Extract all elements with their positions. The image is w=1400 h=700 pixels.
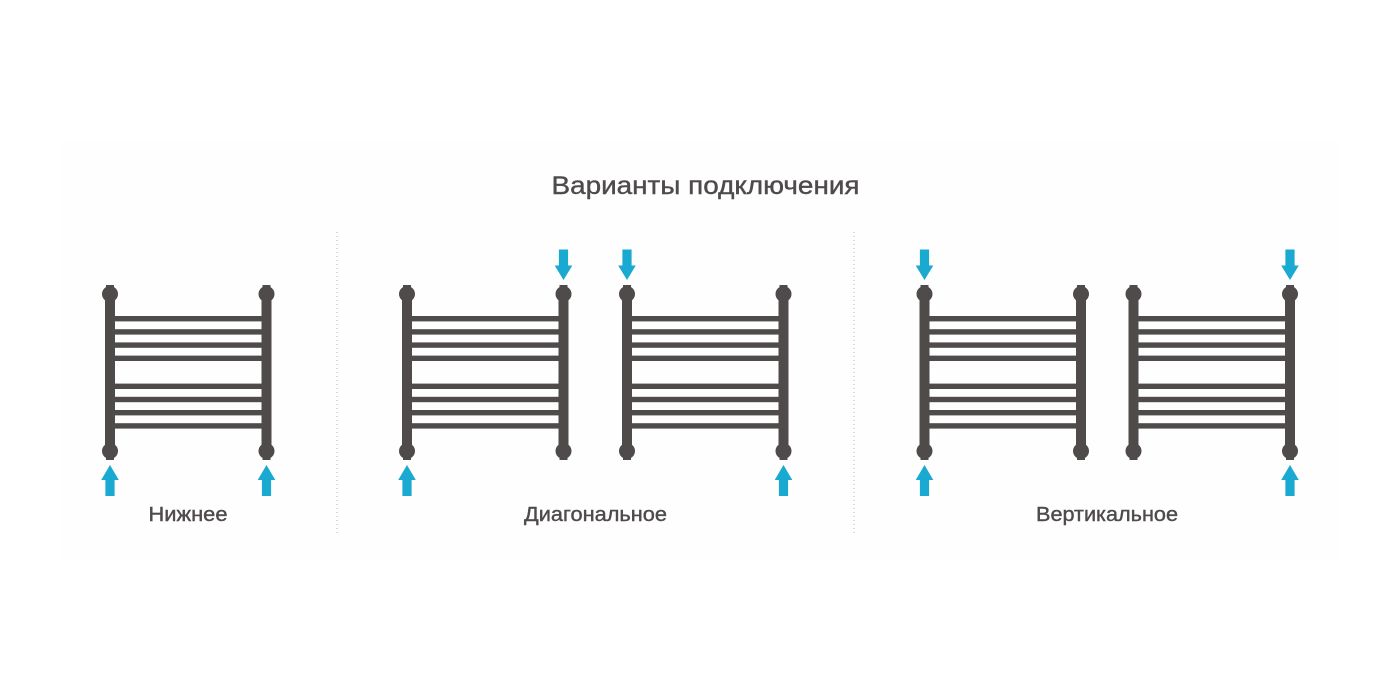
title: Варианты подключения (552, 172, 860, 200)
towel rail icon: diagonal, first (399, 285, 572, 460)
arrow: diagonal second, top left down (618, 250, 636, 280)
towel rail icon: bottom connection (102, 285, 274, 460)
arrow: vertical second, top down (1281, 250, 1299, 280)
towel rail icon: vertical, second (1126, 285, 1298, 460)
towel rail icon: vertical, first (916, 285, 1089, 460)
arrow: diagonal first, bottom left up (398, 465, 416, 496)
panel: vertical connection (916, 250, 1299, 526)
arrow: vertical first, top down (916, 250, 933, 280)
label: bottom connection: Нижнее (148, 504, 228, 526)
arrow: diagonal first, top right down (555, 250, 572, 280)
panel: diagonal connection (398, 250, 792, 526)
background panel (60, 140, 1340, 560)
arrow: left inlet up (101, 465, 119, 496)
towel rail icon: diagonal, second (619, 285, 792, 460)
arrow: right inlet up (258, 465, 275, 496)
arrow: diagonal second, bottom right up (775, 465, 792, 496)
label: diagonal connection: Диагональное (524, 504, 667, 526)
label: vertical connection: Вертикальное (1036, 504, 1178, 526)
arrow: vertical second, bottom up (1281, 465, 1299, 496)
panel: bottom connection (101, 285, 275, 526)
arrow: vertical first, bottom up (916, 465, 933, 496)
